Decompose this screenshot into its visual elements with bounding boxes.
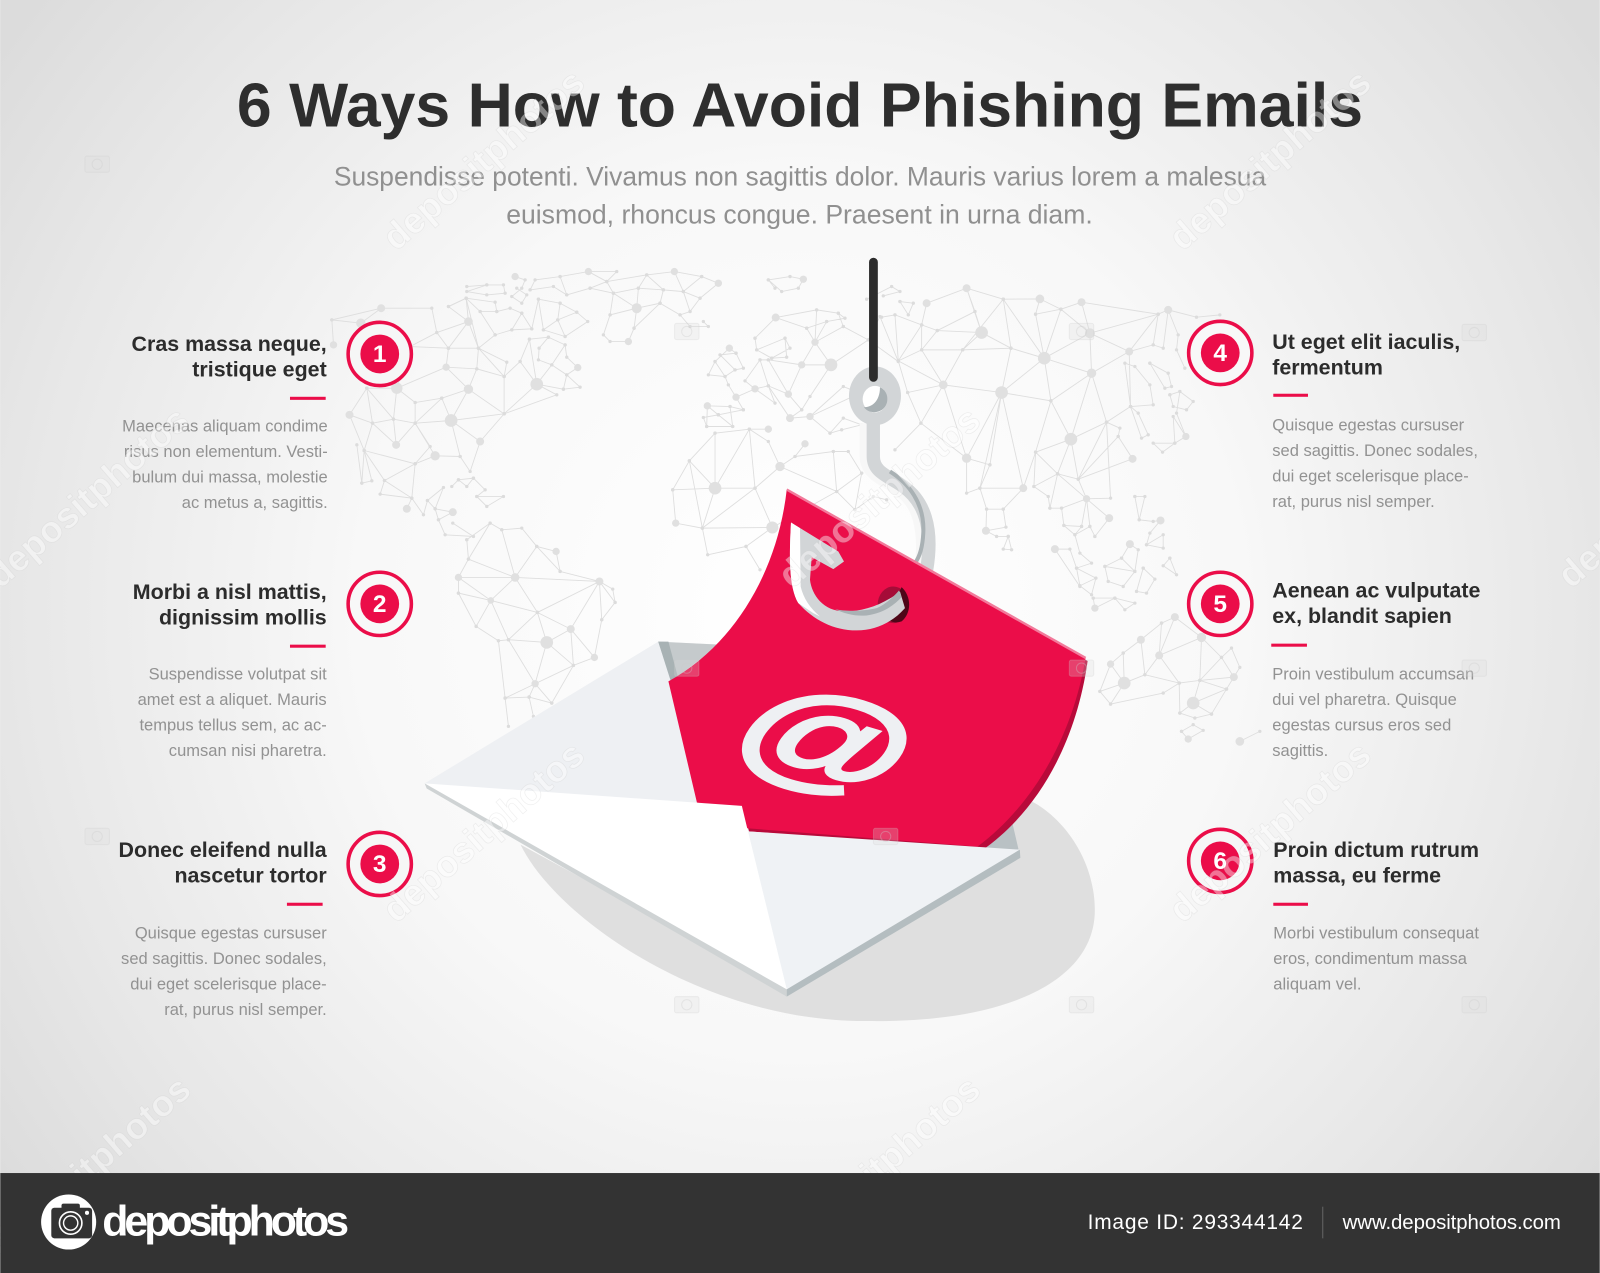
step 5 panel xyxy=(1189,572,1481,760)
step 1 panel: Maecenas aliquam condime xyxy=(122,416,328,435)
footer logo wordmark: depositphotos xyxy=(102,1197,349,1245)
step 4 panel: fermentum xyxy=(1272,355,1383,379)
step 4 panel xyxy=(1189,321,1478,511)
subtitle: Suspendisse potenti. Vivamus non sagittis dolor. Mauris varius lorem a malesua xyxy=(334,162,1267,192)
step 2 panel: Suspendisse volutpat sit xyxy=(149,664,327,683)
envelope back flap xyxy=(425,642,735,816)
step 4 panel: Ut eget elit iaculis, xyxy=(1272,330,1460,354)
world network map xyxy=(330,268,1260,746)
map: Americas and Greenland xyxy=(330,268,722,726)
step 3 panel: rat, purus nisl semper. xyxy=(164,1000,327,1019)
map: Europe and Africa xyxy=(672,276,898,570)
step 4 panel: 4 xyxy=(1213,340,1227,367)
envelope shadow xyxy=(521,801,1095,1021)
step 2 panel: tempus tellus sem, ac ac- xyxy=(139,715,327,734)
fishing line xyxy=(869,262,878,377)
step 4 panel: Quisque egestas cursuser xyxy=(1272,415,1465,434)
step 1 panel: Cras massa neque, xyxy=(132,332,327,356)
watermarks: depositphotos xyxy=(1161,733,1379,930)
footer logo icon xyxy=(41,1194,96,1250)
step 5 panel: Aenean ac vulputate xyxy=(1272,579,1481,603)
watermarks: depositphotos xyxy=(374,61,592,258)
watermarks: depositphotos xyxy=(374,733,592,930)
phishing letter xyxy=(668,490,1088,851)
step 4 panel: rat, purus nisl semper. xyxy=(1272,492,1435,511)
step 5 panel: sagittis. xyxy=(1272,741,1328,760)
hook eye xyxy=(849,367,901,425)
step 1 panel: 1 xyxy=(373,341,387,368)
step 2 panel: 2 xyxy=(373,591,387,618)
watermarks: depositphotos xyxy=(1161,61,1379,258)
footer bar xyxy=(0,1173,1600,1273)
step 6 panel: eros, condimentum massa xyxy=(1273,949,1468,968)
step 6 panel: 6 xyxy=(1213,848,1227,875)
step 6 panel: aliquam vel. xyxy=(1273,974,1361,993)
step 3 panel xyxy=(119,832,411,1019)
image id: Image ID: 293344142 xyxy=(1088,1211,1303,1234)
step 2 panel: dignissim mollis xyxy=(159,605,327,629)
step 6 panel: Morbi vestibulum consequat xyxy=(1273,923,1479,942)
hook upper shaft xyxy=(868,417,929,570)
step 6 panel: massa, eu ferme xyxy=(1273,863,1441,887)
step 5 panel: 5 xyxy=(1213,591,1227,618)
hook point through the letter xyxy=(790,522,909,630)
watermarks: depositphotos xyxy=(770,1068,988,1265)
step 5 panel: egestas cursus eros sed xyxy=(1272,715,1451,734)
step 5 panel: Proin vestibulum accumsan xyxy=(1272,664,1474,683)
step 1 panel: risus non elementum. Vesti- xyxy=(124,442,328,461)
step 3 panel: Quisque egestas cursuser xyxy=(135,923,327,942)
icon: at sign: @ xyxy=(709,656,947,819)
step 3 panel: dui eget scelerisque place- xyxy=(130,974,327,993)
step 1 panel xyxy=(122,322,411,512)
step 1 panel: bulum dui massa, molestie xyxy=(132,467,328,486)
illustration: hooked email xyxy=(425,262,1095,1021)
step 3 panel: 3 xyxy=(373,851,387,878)
step 1 panel: ac metus a, sagittis. xyxy=(182,493,328,512)
step 4 panel: sed sagittis. Donec sodales, xyxy=(1272,441,1478,460)
envelope front flaps xyxy=(748,831,1020,989)
step 6 panel: Proin dictum rutrum xyxy=(1273,838,1479,862)
subtitle: euismod, rhoncus congue. Praesent in urna diam. xyxy=(506,199,1093,229)
step 6 panel xyxy=(1189,829,1479,993)
map: Asia and Australia xyxy=(867,284,1260,746)
step 5 panel: ex, blandit sapien xyxy=(1272,604,1452,628)
step 2 panel: cumsan nisi pharetra. xyxy=(169,741,327,760)
watermarks: depositphotos xyxy=(770,399,988,596)
step 5 panel: dui vel pharetra. Quisque xyxy=(1272,690,1457,709)
step 2 panel: Morbi a nisl mattis, xyxy=(133,580,327,604)
subtitle xyxy=(334,162,1267,229)
step 2 panel: amet est a aliquet. Mauris xyxy=(138,690,327,709)
step 3 panel: Donec eleifend nulla xyxy=(119,838,328,862)
step 3 panel: sed sagittis. Donec sodales, xyxy=(121,949,327,968)
step 2 panel xyxy=(133,572,411,760)
step 1 panel: tristique eget xyxy=(192,357,327,381)
title: 6 Ways How to Avoid Phishing Emails xyxy=(237,71,1363,140)
step 4 panel: dui eget scelerisque place- xyxy=(1272,466,1469,485)
website: www.depositphotos.com xyxy=(1342,1212,1561,1234)
step 3 panel: nascetur tortor xyxy=(174,863,327,887)
